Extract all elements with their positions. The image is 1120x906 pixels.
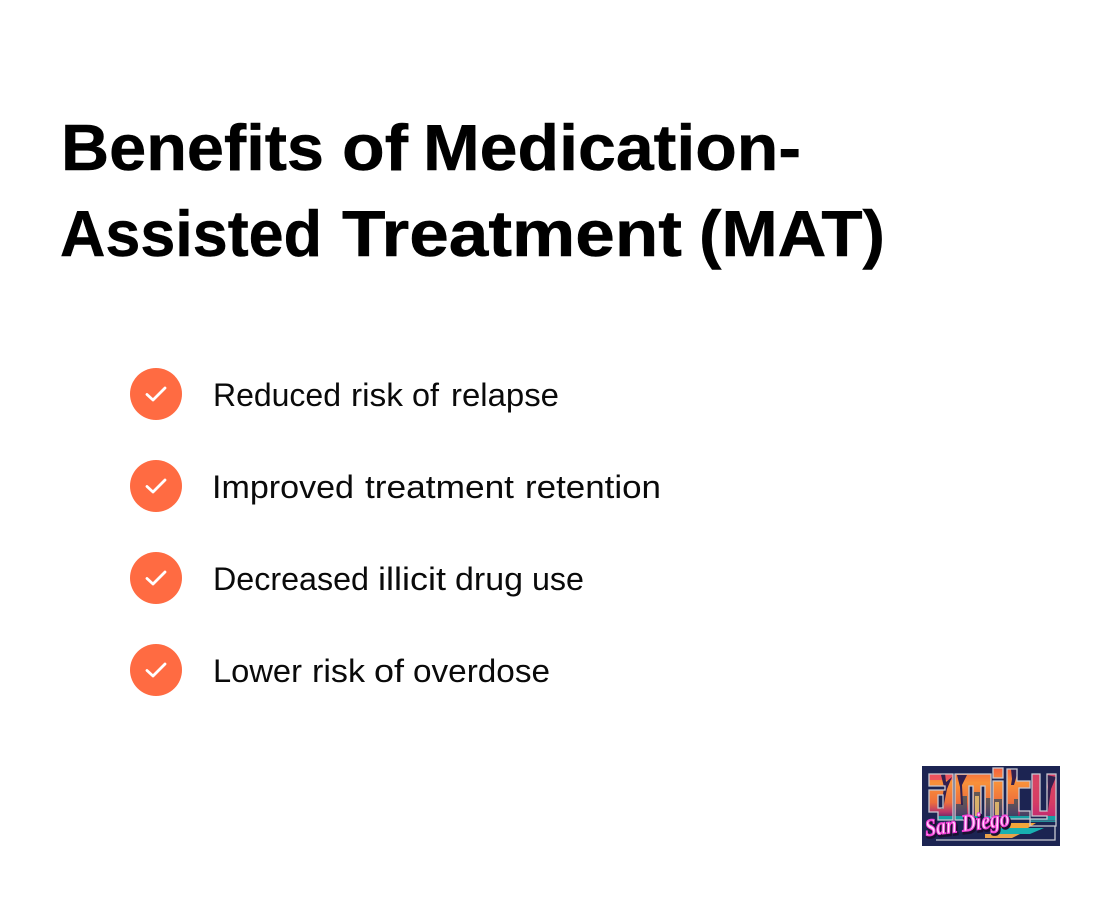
text: improved treatment retention: Improved xyxy=(212,469,354,505)
text: decreased illicit drug use: drug xyxy=(455,561,523,597)
text: improved treatment retention: treatment xyxy=(365,469,514,505)
logo frame line xyxy=(936,826,1055,840)
logo beach stripes xyxy=(985,823,1044,838)
icon: check mark xyxy=(130,460,182,512)
logo letterforms: amity xyxy=(925,766,1060,826)
list item: lower risk of overdose xyxy=(130,644,550,696)
text: lower risk of overdose: risk xyxy=(312,653,366,689)
title: Medication- xyxy=(423,111,801,184)
text: lower risk of overdose: Lower xyxy=(213,653,302,689)
text: reduced risk of relapse: of xyxy=(412,377,440,413)
text: improved treatment retention: retention xyxy=(525,469,661,505)
text: reduced risk of relapse: relapse xyxy=(451,377,559,413)
text: improved treatment retention xyxy=(212,469,661,505)
text: decreased illicit drug use: Decreased xyxy=(213,561,369,597)
title xyxy=(60,111,885,270)
icon: check mark xyxy=(130,368,182,420)
logo: Amity San Diego xyxy=(922,766,1060,846)
text: reduced risk of relapse xyxy=(213,377,559,413)
text: lower risk of overdose xyxy=(213,653,550,689)
text: lower risk of overdose: of xyxy=(374,653,405,689)
title: (MAT) xyxy=(699,197,885,270)
list item: reduced risk of relapse xyxy=(130,368,559,420)
icon: check mark xyxy=(130,552,182,604)
icon: check mark xyxy=(130,644,182,696)
text: reduced risk of relapse: Reduced xyxy=(213,377,341,413)
text: decreased illicit drug use: use xyxy=(532,561,584,597)
text: decreased illicit drug use: illicit xyxy=(378,561,446,597)
text: lower risk of overdose: overdose xyxy=(413,653,550,689)
title: Assisted xyxy=(60,197,322,270)
title: Benefits xyxy=(61,111,324,184)
benefit list xyxy=(130,368,661,696)
text: decreased illicit drug use xyxy=(213,561,584,597)
text: reduced risk of relapse: risk xyxy=(351,377,404,413)
list item: improved treatment retention xyxy=(130,460,661,512)
logo script: San Diego: San Diego xyxy=(925,808,1012,844)
list item: decreased illicit drug use xyxy=(130,552,584,604)
title: Treatment xyxy=(342,197,682,270)
title: of xyxy=(342,111,408,184)
logo script: San Diego: San Diego xyxy=(924,806,1011,842)
